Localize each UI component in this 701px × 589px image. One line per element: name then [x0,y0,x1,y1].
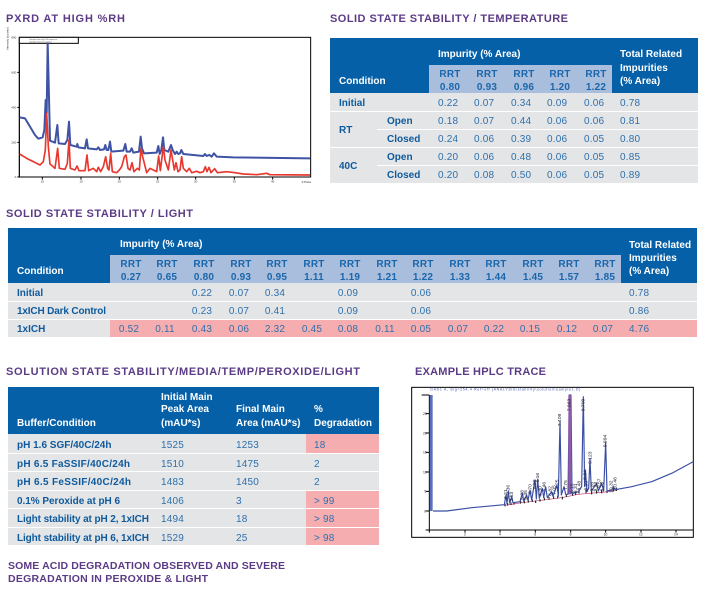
axis labels: 14 [674,533,678,537]
table rows: pH 6.5 FeSSIF/40C/24h [17,477,131,488]
table rows: 0.81 [620,116,641,127]
axis labels: 10 [41,180,44,184]
table header: RRT [230,259,252,270]
table rows: Closed [387,170,420,181]
legend box: Sample after high RH exposure [29,38,58,41]
table rows: 0.86 [629,306,650,317]
table header: RRT [485,259,507,270]
table header: RRT [303,259,325,270]
blue HPLC trace [433,395,693,511]
retention time labels: 5.45 [523,490,529,500]
table header: 1.45 [523,272,543,283]
axis labels: 30 [194,180,198,184]
table header: 1.21 [377,272,397,283]
axis labels: 15 [423,451,427,455]
table rows: 18 [236,514,248,525]
table rows: 0.48 [511,152,532,163]
retention time labels: 5.28 [520,490,526,500]
table header: 1.44 [486,272,506,283]
axis labels: Intensity (counts) [6,27,10,50]
table rows: 2.32 [265,324,285,335]
table rows: 0.06 [229,324,249,335]
axis labels: 12 [639,533,643,537]
retention time labels: 8.31 [573,483,579,493]
table header: 1.11 [304,272,324,283]
conclusion text [8,560,285,585]
table rows: 0.08 [474,170,495,181]
table rows: 1xICH Dark Control [17,306,106,317]
retention time labels: 8.84 [583,470,589,480]
table rows: 0.07 [474,116,495,127]
table rows: 0.12 [557,324,577,335]
table rows: 0.34 [265,288,285,299]
table header: Condition [17,266,64,277]
table rows: 0.07 [593,324,613,335]
retention time labels: 6.46 [542,482,548,492]
table rows: pH 6.5 FaSSIF/40C/24h [17,459,130,470]
table rows: 0.44 [511,116,532,127]
table header: 1.19 [340,272,360,283]
table header: 1.22 [586,82,606,93]
table header [330,38,698,93]
table header [8,387,379,434]
table header: (% Area) [620,76,660,87]
axis labels: 35 [233,180,236,184]
table rows: 1483 [161,477,184,488]
table rows: 1253 [236,440,259,451]
axis labels: 8 [570,533,572,537]
retention time labels: 8.48 [576,481,582,491]
table rows: > 99 [314,496,335,507]
heading: solid state temperature: SOLID STATE STABILITY / TEMPERATURE [330,13,568,25]
table rows: 1510 [161,459,184,470]
axis labels: 0 [424,509,426,513]
table rows: 0.52 [119,324,139,335]
table header: 0.80 [440,82,460,93]
table header: RRT [339,259,361,270]
table rows: 0.89 [620,170,641,181]
table header: Degradation [314,418,372,429]
table header: RRT [193,259,215,270]
retention time labels [503,399,618,502]
table header: 0.93 [231,272,251,283]
table rows: pH 1.6 SGF/40C/24h [17,440,111,451]
table rows: 0.07 [229,288,249,299]
table: solid state stability temperature [330,38,698,183]
table header: RRT [513,69,535,80]
axis labels: 2Theta [302,180,311,184]
retention time labels: 9.43 [593,482,599,492]
conclusion text: DEGRADATION IN PEROXIDE & LIGHT [8,573,209,585]
table header: % [314,404,323,415]
table header: (% Area) [629,266,669,277]
retention time labels: 6.30 [538,486,544,496]
table rows: 0.43 [192,324,212,335]
red PXRD trace [20,113,310,175]
heading: solid state light: SOLID STATE STABILITY / LIGHT [6,208,193,220]
table header: Total Related [620,49,682,60]
axis labels: DAD1 A, Sig=254,4 Ref=off (ANALYSIS\stability\solution\sample1.D) [430,387,580,391]
retention time labels: 10.46 [612,477,618,490]
table rows: > 98 [314,533,335,544]
table rows: 0.41 [265,306,285,317]
table rows: Initial [339,98,365,109]
retention time labels: 7.963 [567,399,573,411]
main peak fill [568,395,571,494]
table rows [330,93,698,183]
table header: 1.33 [450,272,470,283]
axis labels: 4 [499,533,501,537]
table rows: Closed [387,134,420,145]
table header: RRT [449,259,471,270]
table: solution state stability [8,387,379,545]
table rows: 0.06 [411,288,431,299]
table header: 1.85 [595,272,615,283]
table rows: 1450 [236,477,259,488]
table rows: 0.05 [584,170,605,181]
axis labels [6,27,311,184]
table header: RRT [558,259,580,270]
table header: 0.27 [121,272,141,283]
retention time labels: 5.99 [532,479,538,489]
table rows: 0.05 [584,152,605,163]
axis labels: 10 [423,470,427,474]
table rows: 0.45 [302,324,322,335]
table rows: 0.06 [547,170,568,181]
table rows [8,283,697,337]
table rows: 0.11 [155,324,175,335]
table rows: 0.06 [584,116,605,127]
table rows: 0.06 [584,98,605,109]
table header: 0.96 [514,82,534,93]
retention time labels: 9.57 [596,478,602,488]
table rows: 1494 [161,514,184,525]
table rows: 0.23 [192,306,212,317]
retention time labels: 6.16 [535,473,541,483]
table rows: 2 [314,459,320,470]
table rows: > 98 [314,514,335,525]
table rows: 25 [236,533,248,544]
table rows: RT [339,125,352,136]
heading: solution state: SOLUTION STATE STABILITY/MEDIA/TEMP/PEROXIDE/LIGHT [6,366,360,378]
axis labels: 40 [271,180,275,184]
table rows: 1406 [161,496,184,507]
table header: RRT [549,69,571,80]
table rows: 0.20 [438,170,459,181]
table rows: 0.24 [438,134,459,145]
retention time labels: 3.21 [503,489,509,499]
table rows: 1525 [161,440,184,451]
table rows: Light stability at pH 2, 1xICH [17,514,149,525]
chart: example HPLC trace [412,387,693,537]
retention time labels: 8.15 [570,483,576,493]
axis labels: 20 [423,431,427,435]
heading: HPLC: EXAMPLE HPLC TRACE [415,366,546,378]
axis labels: 400 [11,105,17,109]
retention time labels: 9.123 [587,451,593,464]
table header: 0.65 [157,272,177,283]
retention time labels: 3.36 [506,485,512,495]
axis labels: 25 [156,180,160,184]
axis labels: 0 [15,175,17,179]
table rows: 0.07 [448,324,468,335]
table rows: 0.06 [411,306,431,317]
table rows: 40C [339,161,357,172]
table header: 1.20 [550,82,570,93]
table header: Impurities [629,253,677,264]
table rows: 0.22 [484,324,504,335]
table header: 1.22 [413,272,433,283]
table rows: 1475 [236,459,259,470]
table header: Impurity (% Area) [438,49,520,60]
table rows: 0.07 [474,98,495,109]
table: solid state stability light [8,228,697,337]
table header: Buffer/Condition [17,418,96,429]
table header: RRT [476,69,498,80]
table rows: 0.11 [375,324,395,335]
axes [422,395,693,533]
axis labels: 6 [534,533,536,537]
table header: Impurity (% Area) [120,239,202,250]
axis labels: 2 [464,533,466,537]
table rows: Open [387,152,413,163]
table rows: 0.39 [511,134,532,145]
table rows: 0.78 [620,98,641,109]
table rows: 0.06 [474,134,495,145]
table rows: 0.05 [411,324,431,335]
heading: PXRD: PXRD AT HIGH %RH [6,13,125,25]
table rows: Open [387,116,413,127]
table header: RRT [585,69,607,80]
blue PXRD trace [20,43,310,158]
table header: 0.95 [267,272,287,283]
axis labels: 800 [11,35,17,39]
table header: RRT [266,259,288,270]
conclusion text: SOME ACID DEGRADATION OBSERVED AND SEVERE [8,560,285,572]
retention time labels: 7.25 [554,479,560,489]
table header: Impurities [620,63,668,74]
table rows: 0.06 [547,152,568,163]
retention time labels: 6.82 [548,486,554,496]
table rows: 0.85 [620,152,641,163]
table rows: 0.06 [474,152,495,163]
axis labels: 600 [11,70,17,74]
axis labels [423,387,678,537]
table header: Total Related [629,240,691,251]
table rows: 4.76 [629,324,650,335]
table rows: 0.50 [511,170,532,181]
table rows: 0.09 [338,306,358,317]
table rows: Initial [17,288,43,299]
table rows: 0.34 [511,98,532,109]
table header: Area (mAU*s) [236,418,300,429]
retention time labels: 7.409 [557,414,563,426]
retention time labels: 9.994 [603,435,609,447]
axis labels: 5 [424,490,426,494]
integration tick marks [505,488,616,506]
table rows: 0.22 [192,288,212,299]
table rows: 0.15 [520,324,540,335]
table rows: 0.08 [338,324,358,335]
axis labels: 200 [11,140,17,144]
table header: (mAU*s) [161,418,200,429]
table rows: 0.80 [620,134,641,145]
table header [8,228,697,283]
table header: RRT [439,69,461,80]
table rows: 0.07 [229,306,249,317]
table rows: 0.06 [547,134,568,145]
table header: RRT [522,259,544,270]
retention time labels: 10.32 [608,480,614,493]
table header: RRT [156,259,178,270]
table header: Initial Main [161,392,213,403]
table rows: 18 [314,440,326,451]
table rows: 0.18 [438,116,459,127]
axis labels: 15 [79,180,83,184]
retention time labels: 3.53 [509,492,515,502]
table rows [8,434,379,545]
table rows: 0.1% Peroxide at pH 6 [17,496,120,507]
axis labels: 20 [118,180,121,184]
table rows: 0.22 [438,98,459,109]
chart: PXRD at high RH [6,27,311,184]
retention time labels: 8.709 [580,399,586,411]
table header: 0.93 [477,82,497,93]
table rows: 0.20 [438,152,459,163]
table header: RRT [376,259,398,270]
retention time labels: 8.90 [584,481,590,491]
axis labels: 10 [604,533,608,537]
retention time labels: 5.70 [528,484,534,494]
retention time labels: 7.75 [563,480,569,490]
table rows: 0.06 [547,116,568,127]
table header: 1.57 [559,272,579,283]
table rows: 0.09 [547,98,568,109]
table rows: 3 [236,496,242,507]
table rows: 1xICH [17,324,45,335]
legend box: Sample reference pattern [29,41,52,44]
retention time labels: 9.26 [589,482,595,492]
table header: Final Main [236,404,285,415]
table rows: 1529 [161,533,184,544]
table header: RRT [594,259,616,270]
retention time labels: 7.05 [552,485,558,495]
table rows: Light stability at pH 6, 1xICH [17,533,149,544]
table rows: 2 [314,477,320,488]
baseline integration [505,490,618,505]
axis labels: 25 [423,412,427,416]
legend box [19,37,78,44]
retention time labels: 9.78 [600,482,606,492]
table rows: 0.78 [629,288,650,299]
table header: Condition [339,76,386,87]
table header: 0.80 [194,272,214,283]
table header: Peak Area [161,404,209,415]
table rows: 0.09 [338,288,358,299]
solvent front peak [427,395,435,511]
table header: RRT [120,259,142,270]
table rows: 0.05 [584,134,605,145]
table header: RRT [412,259,434,270]
